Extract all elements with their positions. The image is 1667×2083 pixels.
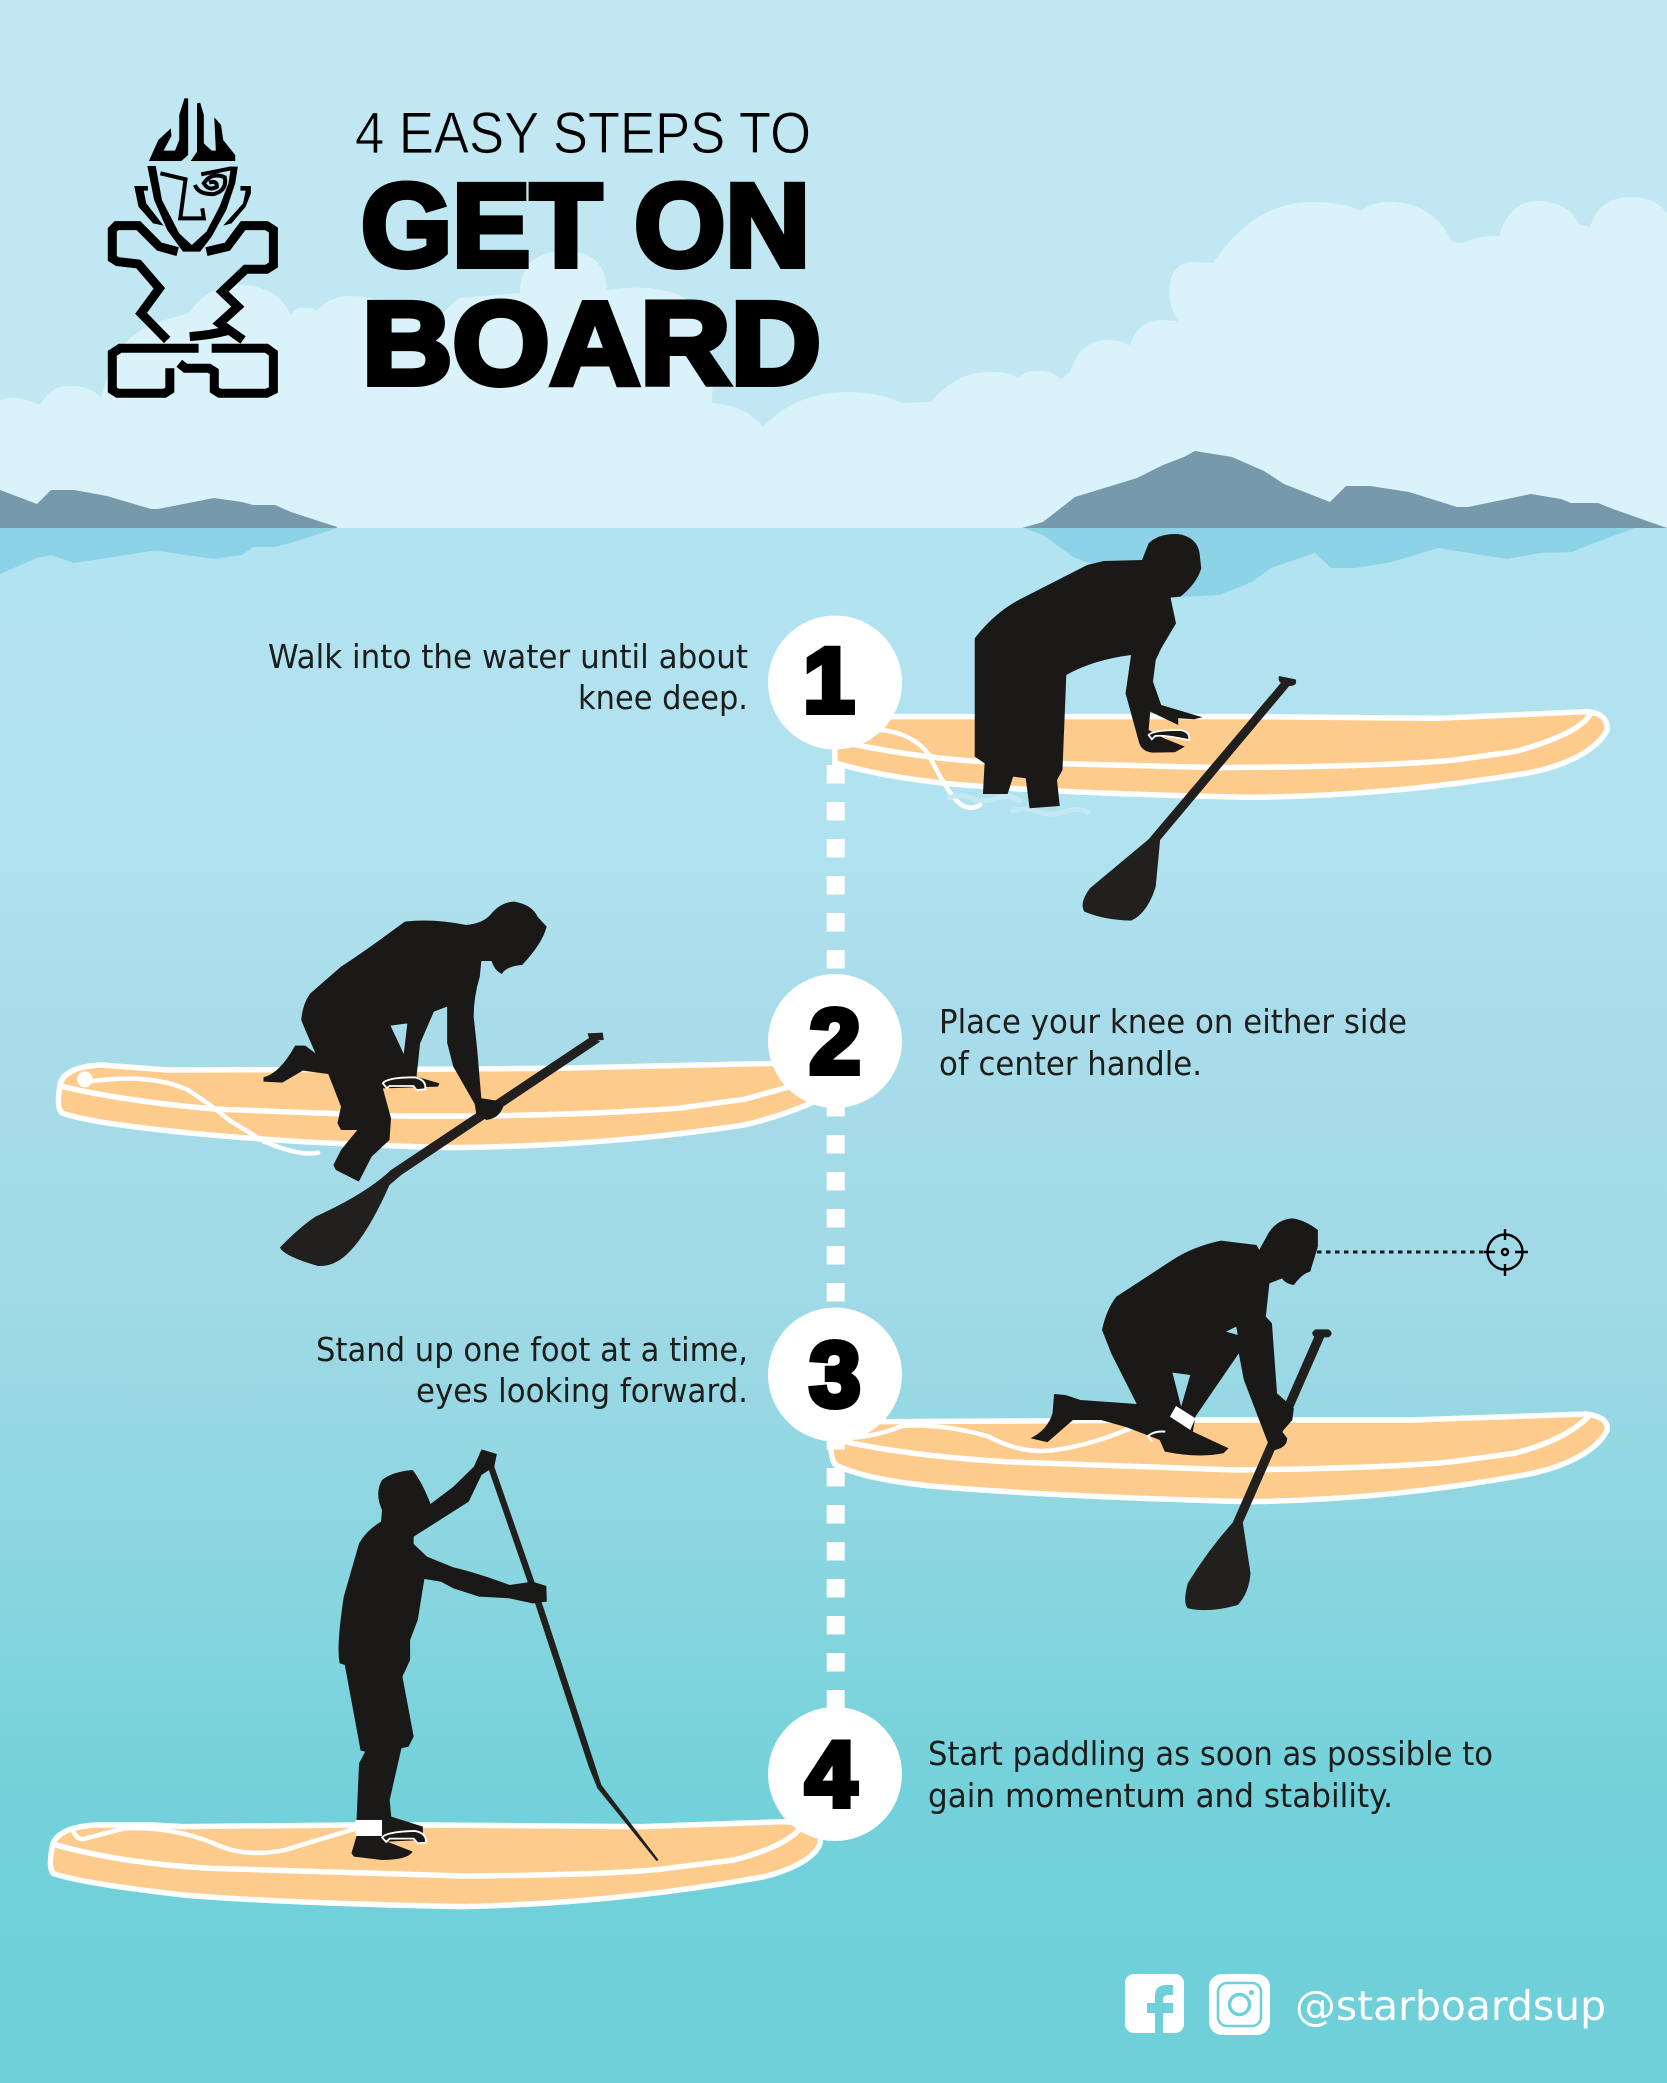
step 2 marker xyxy=(768,974,902,1108)
step 1 marker xyxy=(768,616,902,750)
paddle 1 xyxy=(1083,676,1296,921)
leash 2 plug xyxy=(77,1071,93,1087)
title line: board: BOARD xyxy=(362,278,821,410)
person 1 xyxy=(975,534,1202,808)
board 4 rail xyxy=(56,1828,800,1876)
board 1 rail xyxy=(851,713,1591,768)
step 4 text: gain momentum and stability. xyxy=(928,1776,1393,1815)
water background xyxy=(0,528,1667,2083)
step 3 marker xyxy=(768,1308,902,1442)
step 1 text: Walk into the water until about xyxy=(268,637,748,676)
leash 2 xyxy=(81,1079,318,1153)
step 1 marker: 1 xyxy=(803,630,855,732)
paddle 2 xyxy=(280,1033,604,1266)
logo crown xyxy=(149,98,235,161)
scene 1: walking board into water xyxy=(835,534,1607,921)
step 4 text: Start paddling as soon as possible to xyxy=(928,1734,1493,1773)
water ripples xyxy=(947,796,1090,814)
step 1 text xyxy=(268,637,748,717)
paddle 3 xyxy=(1185,1329,1332,1610)
board 2 xyxy=(58,1063,826,1148)
icon: sight line and target xyxy=(1308,1229,1528,1276)
person 3 xyxy=(1031,1218,1318,1455)
board handle 2 xyxy=(383,1077,425,1090)
step 4 marker: 4 xyxy=(805,1724,857,1826)
leash 1 xyxy=(881,730,980,808)
sky background xyxy=(0,0,1667,528)
social handle: @starboardsup xyxy=(1295,1982,1606,2030)
logo body xyxy=(112,226,273,393)
board handle 4 xyxy=(382,1831,426,1843)
step 2 text: Place your knee on either side xyxy=(939,1002,1407,1041)
dashed connector line xyxy=(827,765,845,1712)
target crosshair xyxy=(1484,1229,1528,1276)
title line: get on: GET ON xyxy=(361,160,810,292)
logo face details xyxy=(160,168,232,218)
board handle 1 xyxy=(1149,730,1189,740)
step 2 text: of center handle. xyxy=(939,1044,1202,1083)
board 3 xyxy=(831,1414,1607,1502)
mountains xyxy=(0,451,1667,528)
mountain reflections xyxy=(0,528,1635,597)
step 3 marker: 3 xyxy=(809,1324,861,1426)
title xyxy=(355,101,821,410)
board 3 rail xyxy=(841,1417,1588,1470)
scene 4: paddling standing up xyxy=(50,1449,820,1907)
step 3 text: eyes looking forward. xyxy=(416,1371,748,1410)
dotted sight line xyxy=(1308,1250,1488,1254)
icon: instagram xyxy=(1209,1974,1270,2035)
board 4 xyxy=(50,1822,820,1907)
person 4 xyxy=(339,1449,547,1860)
board handle 3 xyxy=(1148,1431,1165,1442)
person 2 xyxy=(263,902,547,1182)
scene 2: kneeling on board xyxy=(58,902,826,1266)
paddle 4 xyxy=(488,1467,659,1861)
step 1 text: knee deep. xyxy=(578,678,748,717)
logo: tiki figure xyxy=(112,98,273,393)
step 3 text xyxy=(316,1330,748,1410)
clouds xyxy=(0,197,1667,528)
step 3 text: Stand up one foot at a time, xyxy=(316,1330,748,1369)
step 4 text xyxy=(928,1734,1493,1815)
board 2 rail xyxy=(63,1087,790,1116)
board 1 xyxy=(835,712,1607,797)
ankle strap 4 xyxy=(356,1820,382,1836)
title line: 4 easy steps to: 4 EASY STEPS TO xyxy=(355,101,811,166)
ankle strap 3 xyxy=(1170,1406,1195,1430)
logo face xyxy=(134,166,251,252)
leash 3 xyxy=(846,1410,1172,1451)
step 2 marker: 2 xyxy=(809,991,861,1093)
scene 3: standing up with eyes forward xyxy=(831,1218,1607,1610)
step 4 marker xyxy=(768,1707,902,1841)
step 2 text xyxy=(939,1002,1407,1083)
icon: facebook xyxy=(1125,1974,1184,2033)
leash 4 xyxy=(73,1828,357,1853)
